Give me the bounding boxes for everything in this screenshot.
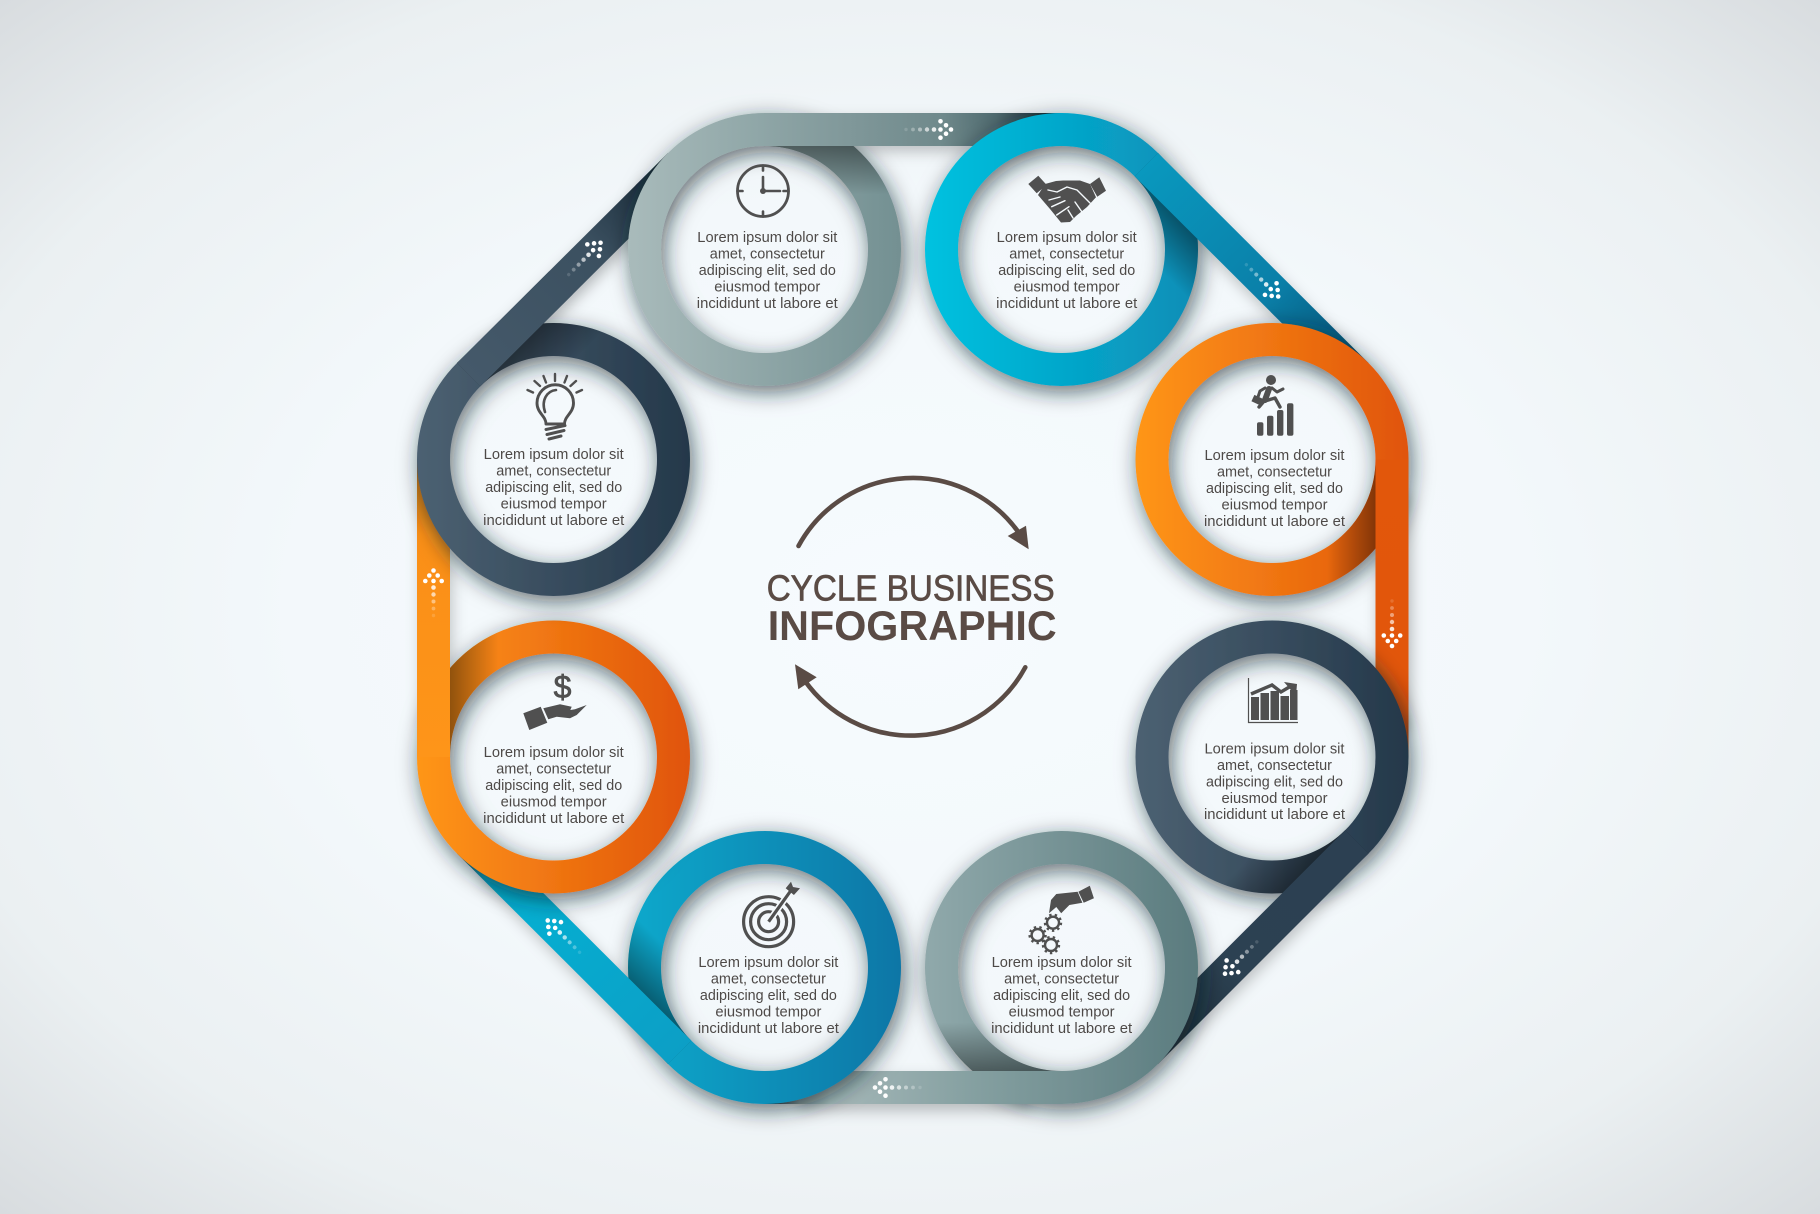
text block: incididunt ut labore et: [697, 296, 838, 312]
text block: eiusmod tempor: [501, 496, 607, 512]
text block: incididunt ut labore et: [996, 296, 1137, 312]
title: CYCLE BUSINESS: [767, 568, 1055, 609]
text block: adipiscing elit, sed do: [1206, 481, 1343, 497]
text block: amet, consectetur: [1217, 758, 1332, 774]
text block: adipiscing elit, sed do: [998, 263, 1135, 279]
icon: hand with gears: [1030, 886, 1094, 953]
panel: step target (blue ring, bottom left): [469, 842, 884, 1088]
text block: [996, 230, 1137, 312]
icon: hand with dollar: $: [554, 669, 572, 705]
arrow: top cycle arc: [798, 478, 1029, 549]
text block: [483, 447, 624, 529]
icon: light bulb: [528, 374, 582, 439]
text block: Lorem ipsum dolor sit: [992, 955, 1132, 971]
panel: step runner (orange ring, right upper): [1152, 340, 1402, 757]
text block: adipiscing elit, sed do: [993, 988, 1130, 1004]
text block: Lorem ipsum dolor sit: [484, 745, 624, 761]
text block: eiusmod tempor: [1222, 791, 1328, 807]
panel: step growth chart (dark ring, right lower): [1146, 637, 1392, 1052]
text block: amet, consectetur: [711, 972, 826, 988]
ribbon: dark connector running up to the gray ring: [469, 165, 680, 375]
text block: [991, 955, 1132, 1037]
text block: Lorem ipsum dolor sit: [1204, 742, 1344, 758]
text block: [697, 230, 838, 312]
panel: step handshake (blue ring, top right): [942, 130, 1357, 375]
panel: step idea (dark ring, left upper): [434, 165, 680, 580]
panel: step gears (gray-teal ring, bottom right): [764, 848, 1182, 1098]
text block: adipiscing elit, sed do: [1206, 774, 1343, 790]
text block: eiusmod tempor: [1014, 280, 1120, 296]
text block: adipiscing elit, sed do: [485, 778, 622, 794]
icon: growth chart: [1248, 678, 1298, 722]
text block: adipiscing elit, sed do: [699, 263, 836, 279]
text block: Lorem ipsum dolor sit: [997, 230, 1137, 246]
text block: Lorem ipsum dolor sit: [697, 230, 837, 246]
text block: eiusmod tempor: [715, 1004, 822, 1020]
text block: eiusmod tempor: [501, 794, 607, 810]
text block: [698, 955, 839, 1037]
text block: Lorem ipsum dolor sit: [1204, 448, 1344, 464]
text block: amet, consectetur: [1004, 972, 1119, 988]
text block: [1204, 448, 1345, 530]
text block: Lorem ipsum dolor sit: [484, 447, 624, 463]
icon: runner climbing bars: [1251, 375, 1293, 436]
text block: [483, 745, 624, 827]
text block: amet, consectetur: [710, 246, 825, 262]
text block: incididunt ut labore et: [483, 513, 624, 529]
text block: adipiscing elit, sed do: [485, 480, 622, 496]
text block: incididunt ut labore et: [991, 1021, 1132, 1037]
icon: target with arrow: [744, 882, 800, 947]
text block: incididunt ut labore et: [1204, 514, 1345, 530]
text block: amet, consectetur: [496, 762, 611, 778]
icon: handshake: [1028, 176, 1106, 222]
text block: eiusmod tempor: [714, 280, 820, 296]
title: INFOGRAPHIC: [768, 602, 1057, 649]
icon: hand with dollar: [523, 669, 587, 730]
text block: adipiscing elit, sed do: [700, 988, 837, 1004]
panel: step clock (gray ring, top left): [644, 119, 1062, 370]
text block: eiusmod tempor: [1009, 1004, 1115, 1020]
panel: step money (orange ring, left lower): [423, 460, 674, 877]
arrow: bottom cycle arc: [795, 664, 1025, 736]
text block: [1204, 742, 1345, 823]
title: [767, 568, 1057, 649]
text block: amet, consectetur: [496, 464, 611, 480]
icon: clock: [738, 166, 788, 216]
text block: eiusmod tempor: [1222, 497, 1328, 513]
text block: incididunt ut labore et: [483, 811, 624, 827]
text block: amet, consectetur: [1009, 246, 1124, 262]
text block: Lorem ipsum dolor sit: [698, 955, 838, 971]
text block: incididunt ut labore et: [698, 1021, 839, 1037]
text block: incididunt ut labore et: [1204, 807, 1345, 823]
text block: amet, consectetur: [1217, 464, 1332, 480]
